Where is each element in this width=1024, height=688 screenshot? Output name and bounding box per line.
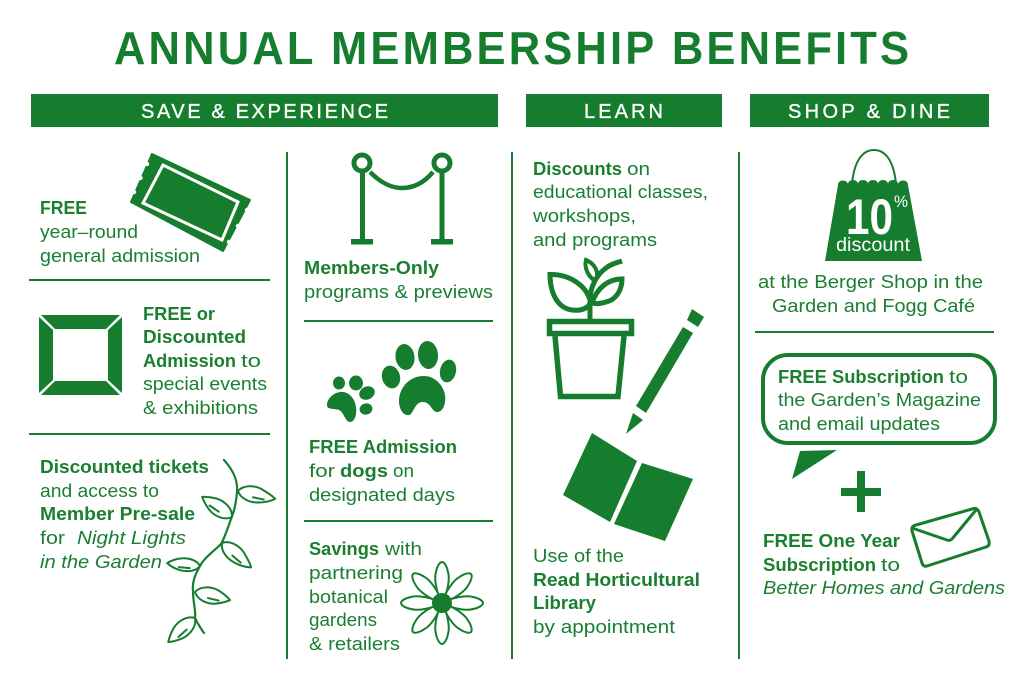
header: learn — [526, 94, 722, 127]
icon: daisy flower — [401, 562, 483, 644]
text: night lights: for — [40, 527, 65, 548]
speech bubble — [763, 355, 995, 479]
text: members only: programs & previews — [304, 281, 493, 302]
speech bubble: FREE Subscription — [778, 366, 944, 387]
text: savings: & retailers — [309, 633, 400, 654]
icon: shopping bag 10% discount: 10 — [846, 188, 893, 245]
text: dogs — [309, 436, 457, 505]
icon: ticket — [131, 154, 250, 251]
text: members only — [304, 257, 493, 302]
text: night lights: Member Pre-sale — [40, 503, 195, 524]
text: members only: Members-Only — [304, 257, 440, 278]
text: library: Read Horticultural — [533, 569, 700, 590]
speech bubble: and email updates — [778, 413, 940, 434]
text: dogs: designated days — [309, 484, 455, 505]
text: library — [533, 545, 700, 637]
text: discounts on classes: educational classes, — [533, 181, 708, 202]
text: special events: special events — [143, 373, 267, 394]
text: night lights: Discounted tickets — [40, 456, 209, 477]
text: savings: partnering — [309, 562, 403, 583]
header: save and experience — [31, 94, 498, 127]
icon: paw prints — [327, 340, 458, 422]
text: better homes and gardens — [763, 530, 1005, 598]
text: savings: botanical — [309, 586, 388, 607]
icon: shopping bag 10% discount — [825, 150, 922, 261]
icon: potted plant — [550, 260, 632, 396]
text: savings: gardens — [309, 609, 377, 630]
icon: picture frame — [39, 315, 122, 395]
icon: plus — [841, 471, 881, 512]
text: free admission: year–round — [40, 221, 138, 242]
text: special events — [143, 303, 267, 418]
text: special events: & exhibitions — [143, 397, 258, 418]
icon: string lights — [163, 460, 277, 648]
icon: open book — [563, 433, 693, 541]
text: berger shop: Garden and Fogg Café — [772, 295, 975, 316]
text: special events: to — [241, 350, 261, 371]
header: shop and dine: SHOP & DINE — [788, 101, 950, 123]
text: special events: Admission — [143, 350, 236, 371]
text: discounts on classes: workshops, — [532, 205, 636, 226]
text: library: Use of the — [533, 545, 624, 566]
text: discounts on classes: Discounts — [533, 158, 622, 179]
text: library: by appointment — [533, 616, 675, 637]
text: library: Library — [533, 592, 597, 613]
text: better homes and gardens: to — [881, 554, 900, 575]
text: free admission: FREE — [40, 197, 87, 218]
header: save and experience: SAVE & EXPERIENCE — [141, 101, 388, 123]
text: savings: Savings — [309, 538, 379, 559]
text: free admission — [40, 197, 200, 266]
icon: pencil — [626, 309, 704, 434]
text: night lights: in the Garden — [40, 551, 162, 572]
text: night lights: Night Lights — [77, 527, 186, 548]
text: better homes and gardens: FREE One Year — [763, 530, 900, 551]
icon: shopping bag 10% discount: discount — [836, 235, 911, 256]
text: discounts on classes: on — [627, 158, 650, 179]
text: dogs: dogs — [340, 460, 388, 481]
text: dogs: FREE Admission — [309, 436, 457, 457]
text: discounts on classes — [532, 158, 708, 250]
text: special events: Discounted — [143, 326, 246, 347]
text: discounts on classes: and programs — [533, 229, 657, 250]
text: free admission: general admission — [40, 245, 200, 266]
text: savings — [309, 538, 422, 654]
text: dogs: on — [393, 460, 414, 481]
text: better homes and gardens: Subscription — [763, 554, 876, 575]
text: night lights — [40, 456, 209, 572]
text: berger shop — [758, 271, 983, 316]
text: dogs: for — [309, 460, 335, 481]
header: shop and dine — [750, 94, 989, 127]
speech bubble: to — [949, 366, 968, 387]
icon: velvet rope stanchions — [351, 155, 453, 244]
text: night lights: and access to — [40, 480, 159, 501]
header: learn: LEARN — [584, 101, 663, 123]
icon: shopping bag 10% discount: % — [894, 192, 908, 211]
text: better homes and gardens: Better Homes and Gardens — [763, 577, 1005, 598]
text: special events: FREE or — [143, 303, 215, 324]
icon: envelope — [912, 508, 989, 566]
title: ANNUAL MEMBERSHIP BENEFITS — [114, 23, 909, 74]
text: savings: with — [384, 538, 422, 559]
speech bubble: the Garden’s Magazine — [778, 389, 981, 410]
text: berger shop: at the Berger Shop in the — [758, 271, 983, 292]
